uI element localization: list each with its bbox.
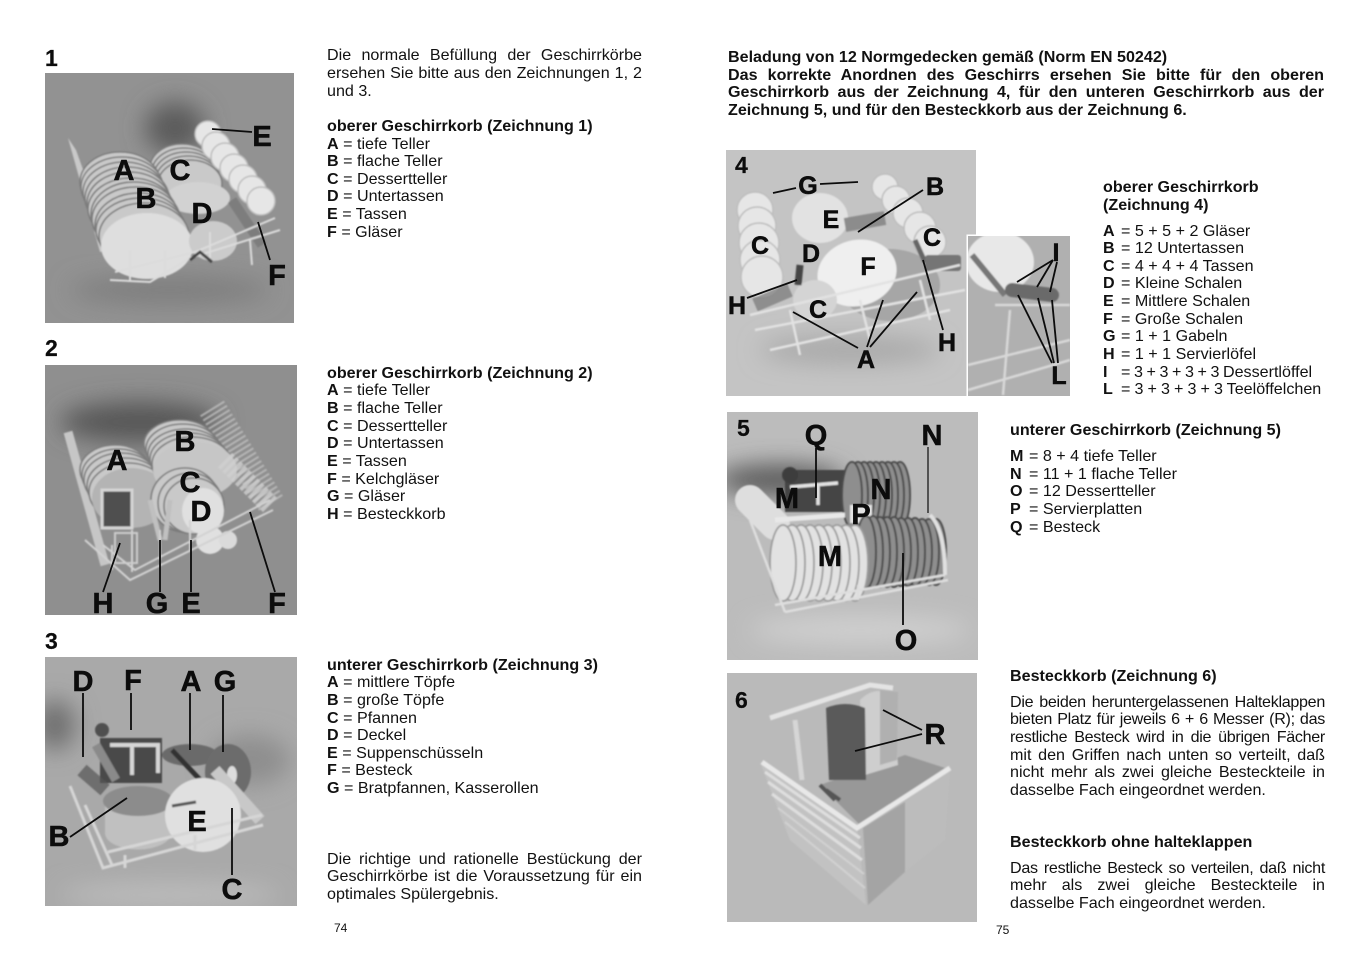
closing note, left page [327, 850, 642, 903]
legend: oberer Geschirrkorb Zeichnung 2: D = Untertassen [327, 434, 444, 452]
legend: oberer Geschirrkorb Zeichnung 2 [327, 364, 593, 523]
legend: oberer Geschirrkorb Zeichnung 4: = 5 + 5 + 2 Gläser [1121, 222, 1250, 240]
intro heading, right page: Geschirrkorb aus der Zeichnung 4, für den unteren Geschirrkorb aus der [728, 83, 1324, 101]
legend: unterer Geschirrkorb Zeichnung 3: B = große Töpfe [327, 691, 444, 709]
text: Besteckkorb Zeichnung 6: Besteckkorb (Zeichnung 6) [1010, 667, 1217, 685]
text: Besteckkorb ohne halteklappen: mehr als zwei gleiche Besteckteile in [1010, 876, 1325, 894]
legend: oberer Geschirrkorb Zeichnung 4 [1103, 178, 1321, 398]
legend: oberer Geschirrkorb Zeichnung 2: B = flache Teller [327, 399, 443, 417]
callout letters photo 1: C [170, 155, 191, 187]
legend: unterer Geschirrkorb Zeichnung 3: E = Suppenschüsseln [327, 744, 483, 762]
photo 2: upper rack with glasses [45, 335, 297, 620]
intro heading, right page: Zeichnung 5, und für den Besteckkorb aus der Zeichnung 6. [728, 101, 1187, 119]
legend: unterer Geschirrkorb Zeichnung 3: unterer Geschirrkorb (Zeichnung 3) [327, 656, 598, 674]
intro text, left page: und 3. [327, 82, 372, 100]
legend: oberer Geschirrkorb Zeichnung 4: C [1103, 257, 1115, 275]
photo 4: upper rack loaded, with inset [726, 150, 1070, 396]
callout letters photo 3: A [181, 666, 202, 698]
text: Besteckkorb ohne halteklappen: Das restliche Besteck so verteilen, daß nicht [1010, 859, 1325, 877]
label: figure number 4: 4 [735, 152, 748, 178]
leader lines photo 4 [747, 182, 1058, 363]
callout letters photo 1: F [268, 260, 286, 292]
callout letters photo 2: B [175, 426, 195, 458]
legend: oberer Geschirrkorb Zeichnung 2: E = Tassen [327, 452, 407, 470]
legend: oberer Geschirrkorb Zeichnung 4: B [1103, 239, 1115, 257]
legend: unterer Geschirrkorb Zeichnung 3: D = Deckel [327, 726, 406, 744]
callout letters photo 5: M [775, 483, 799, 515]
legend: oberer Geschirrkorb Zeichnung 4: H [1103, 345, 1115, 363]
label: figure number 5: 5 [737, 415, 750, 441]
legend: oberer Geschirrkorb Zeichnung 2: F = Kelchgläser [327, 470, 439, 488]
callout letters photo 2: D [191, 496, 211, 528]
callout letters photo 1: A [114, 155, 135, 187]
legend: unterer Geschirrkorb Zeichnung 3: F = Besteck [327, 761, 412, 779]
callout letters photo 4: H [728, 292, 746, 320]
text: Besteckkorb ohne halteklappen [1010, 833, 1326, 912]
legend: oberer Geschirrkorb Zeichnung 4: = 3 + 3 + 3 + 3 Teelöffelchen [1121, 380, 1321, 398]
leader lines photo 5 [816, 447, 928, 625]
callout letters photo 4: D [802, 240, 820, 268]
legend: unterer Geschirrkorb Zeichnung 3 [327, 656, 598, 797]
text: Besteckkorb Zeichnung 6: Die beiden heruntergelassenen Halteklappen [1010, 693, 1325, 711]
callout letters photo 4: A [857, 346, 875, 374]
leader lines photo 2 [103, 512, 275, 592]
callout letters photo 4: L [1051, 362, 1067, 390]
photo 3: lower rack with pots [45, 628, 297, 906]
legend: oberer Geschirrkorb Zeichnung 1: A = tiefe Teller [327, 135, 430, 153]
callout letters photo 4: C [751, 232, 769, 260]
callout letters photo 3: C [222, 874, 243, 906]
callout letters photo 2: G [146, 588, 168, 620]
legend: oberer Geschirrkorb Zeichnung 4: = 1 + 1 Gabeln [1121, 327, 1227, 345]
legend: oberer Geschirrkorb Zeichnung 4: A [1103, 222, 1115, 240]
legend: oberer Geschirrkorb Zeichnung 4: = Große Schalen [1121, 310, 1243, 328]
callout letters photo 3: E [187, 806, 207, 838]
page number 75: 75 [996, 923, 1009, 937]
legend: oberer Geschirrkorb Zeichnung 1: F = Gläser [327, 223, 403, 241]
intro heading, right page: Beladung von 12 Normgedecken gemäß (Norm EN 50242) [728, 48, 1167, 66]
callout letters photo 2: E [181, 588, 201, 620]
legend: oberer Geschirrkorb Zeichnung 4: = Mittlere Schalen [1121, 292, 1250, 310]
legend: unterer Geschirrkorb Zeichnung 5: N [1010, 465, 1022, 483]
callout letters photo 3: G [214, 666, 236, 698]
text: Besteckkorb Zeichnung 6: dasselbe Fach eingeordnet werden. [1010, 781, 1266, 799]
legend: oberer Geschirrkorb Zeichnung 4: L [1103, 380, 1113, 398]
callout letters photo 3: F [124, 665, 142, 697]
callout letters photo 4: B [926, 173, 944, 201]
text: Besteckkorb Zeichnung 6: restliche Besteck wird in die übrigen Fächer [1010, 728, 1325, 746]
legend: unterer Geschirrkorb Zeichnung 5: = 8 + 4 tiefe Teller [1029, 447, 1157, 465]
legend: oberer Geschirrkorb Zeichnung 4: F [1103, 310, 1113, 328]
legend: unterer Geschirrkorb Zeichnung 5: unterer Geschirrkorb (Zeichnung 5) [1010, 421, 1281, 439]
legend: oberer Geschirrkorb Zeichnung 4: = 4 + 4 + 4 Tassen [1121, 257, 1254, 275]
legend: oberer Geschirrkorb Zeichnung 4: D [1103, 274, 1115, 292]
legend: unterer Geschirrkorb Zeichnung 5 [1010, 421, 1281, 536]
legend: oberer Geschirrkorb Zeichnung 1 [327, 117, 593, 241]
photo 1: upper rack with plates [45, 45, 294, 323]
legend: oberer Geschirrkorb Zeichnung 4: I [1103, 363, 1107, 381]
legend: unterer Geschirrkorb Zeichnung 5: M [1010, 447, 1023, 465]
legend: oberer Geschirrkorb Zeichnung 1: E = Tassen [327, 205, 407, 223]
legend: unterer Geschirrkorb Zeichnung 5: = Servierplatten [1029, 500, 1142, 518]
callout letters photo 4: G [798, 172, 818, 200]
callout letters photo 4: E [823, 206, 839, 234]
page number 74: 74 [334, 921, 347, 935]
text: Besteckkorb Zeichnung 6: nicht mehr als zwei gleiche Besteckteile in [1010, 763, 1325, 781]
callout letters photo 1 [114, 121, 286, 292]
callout letters photo 3: B [49, 821, 69, 853]
callout letters photo 5: M [818, 541, 842, 573]
intro text, left page: Die normale Befüllung der Geschirrkörbe [327, 46, 642, 64]
text: Besteckkorb Zeichnung 6 [1010, 667, 1325, 799]
callout letters photo 4 [728, 172, 1067, 390]
legend: oberer Geschirrkorb Zeichnung 2: C = Dessertteller [327, 417, 447, 435]
closing note, left page: Geschirrkörbe ist die Voraussetzung für ein [327, 867, 642, 885]
callout letters photo 4: C [809, 296, 827, 324]
legend: unterer Geschirrkorb Zeichnung 5: Q [1010, 518, 1023, 536]
legend: oberer Geschirrkorb Zeichnung 2: H = Besteckkorb [327, 505, 446, 523]
leader lines photo 6 [855, 710, 922, 751]
leader lines photo 1 [212, 129, 270, 260]
callout letters photo 5 [775, 420, 942, 657]
legend: oberer Geschirrkorb Zeichnung 4: G [1103, 327, 1116, 345]
intro text, left page: ersehen Sie bitte aus den Zeichnungen 1, 2 [327, 64, 642, 82]
text: Besteckkorb ohne halteklappen: dasselbe Fach eingeordnet werden. [1010, 894, 1266, 912]
callout letters photo 5: Q [805, 420, 827, 452]
callout letters photo 2: A [107, 445, 128, 477]
callout letters photo 5: N [922, 420, 942, 452]
legend: oberer Geschirrkorb Zeichnung 1: oberer Geschirrkorb (Zeichnung 1) [327, 117, 593, 135]
legend: unterer Geschirrkorb Zeichnung 5: P [1010, 500, 1021, 518]
legend: oberer Geschirrkorb Zeichnung 4: oberer Geschirrkorb [1103, 178, 1259, 196]
legend: unterer Geschirrkorb Zeichnung 5: = Besteck [1029, 518, 1100, 536]
legend: oberer Geschirrkorb Zeichnung 1: D = Untertassen [327, 187, 444, 205]
callout letters photo 4: I [1053, 239, 1059, 267]
callout letters photo 4: C [923, 224, 941, 252]
closing note, left page: Die richtige und rationelle Bestückung der [327, 850, 642, 868]
callout letters photo 3: D [73, 666, 93, 698]
legend: unterer Geschirrkorb Zeichnung 3: G = Bratpfannen, Kasserollen [327, 779, 539, 797]
callout letters photo 5: O [895, 625, 917, 657]
callout letters photo 2 [93, 426, 286, 620]
callout letters photo 5: N [871, 474, 891, 506]
closing note, left page: optimales Spülergebnis. [327, 885, 499, 903]
legend: oberer Geschirrkorb Zeichnung 2: A = tiefe Teller [327, 381, 430, 399]
legend: oberer Geschirrkorb Zeichnung 4: E [1103, 292, 1114, 310]
legend: oberer Geschirrkorb Zeichnung 1: B = flache Teller [327, 152, 443, 170]
legend: unterer Geschirrkorb Zeichnung 3: A = mittlere Töpfe [327, 673, 455, 691]
legend: oberer Geschirrkorb Zeichnung 4: (Zeichnung 4) [1103, 196, 1208, 214]
callout letters photo 3 [49, 665, 243, 906]
label: figure number 2: 2 [45, 335, 58, 361]
callout letter R: R [925, 719, 946, 751]
label: figure number 3: 3 [45, 628, 58, 654]
intro text, left page [327, 46, 642, 100]
intro heading, right page [728, 48, 1324, 119]
legend: oberer Geschirrkorb Zeichnung 1: C = Dessertteller [327, 170, 447, 188]
text: Besteckkorb ohne halteklappen: Besteckkorb ohne halteklappen [1010, 833, 1252, 851]
legend: oberer Geschirrkorb Zeichnung 2: oberer Geschirrkorb (Zeichnung 2) [327, 364, 593, 382]
text: Besteckkorb Zeichnung 6: mit den Griffen nach unten so verteilt, daß [1010, 746, 1325, 764]
legend: oberer Geschirrkorb Zeichnung 4: = Kleine Schalen [1121, 274, 1242, 292]
photo 6: cutlery basket [727, 673, 977, 922]
legend: unterer Geschirrkorb Zeichnung 3: C = Pfannen [327, 709, 417, 727]
legend: oberer Geschirrkorb Zeichnung 4: = 3 + 3 + 3 + 3 Dessertlöffel [1121, 363, 1312, 381]
callout letters photo 2: F [268, 588, 286, 620]
callout letters photo 2: H [93, 588, 113, 620]
inset photo [966, 232, 1070, 396]
legend: oberer Geschirrkorb Zeichnung 2: G = Gläser [327, 487, 405, 505]
text: Besteckkorb Zeichnung 6: bieten Platz für jeweils 6 + 6 Messer (R); das [1010, 710, 1325, 728]
intro heading, right page: Das korrekte Anordnen des Geschirrs ersehen Sie bitte für den oberen [728, 66, 1324, 84]
label: figure number 6: 6 [735, 687, 748, 713]
label: figure number 1: 1 [45, 45, 58, 71]
callout letters photo 4: H [938, 329, 956, 357]
callout letters photo 5: P [851, 499, 871, 531]
callout letters photo 4: F [860, 253, 876, 281]
legend: unterer Geschirrkorb Zeichnung 5: O [1010, 482, 1023, 500]
legend: oberer Geschirrkorb Zeichnung 4: = 12 Untertassen [1121, 239, 1244, 257]
leader lines photo 3 [70, 693, 232, 875]
legend: oberer Geschirrkorb Zeichnung 4: = 1 + 1 Servierlöfel [1121, 345, 1256, 363]
callout letters photo 1: E [252, 121, 272, 153]
photo 5: lower rack with plates [727, 412, 978, 660]
legend: unterer Geschirrkorb Zeichnung 5: = 11 + 1 flache Teller [1029, 465, 1177, 483]
callout letters photo 2: C [180, 467, 201, 499]
legend: unterer Geschirrkorb Zeichnung 5: = 12 Dessertteller [1029, 482, 1156, 500]
callout letters photo 1: D [192, 198, 212, 230]
callout letters photo 1: B [136, 183, 156, 215]
